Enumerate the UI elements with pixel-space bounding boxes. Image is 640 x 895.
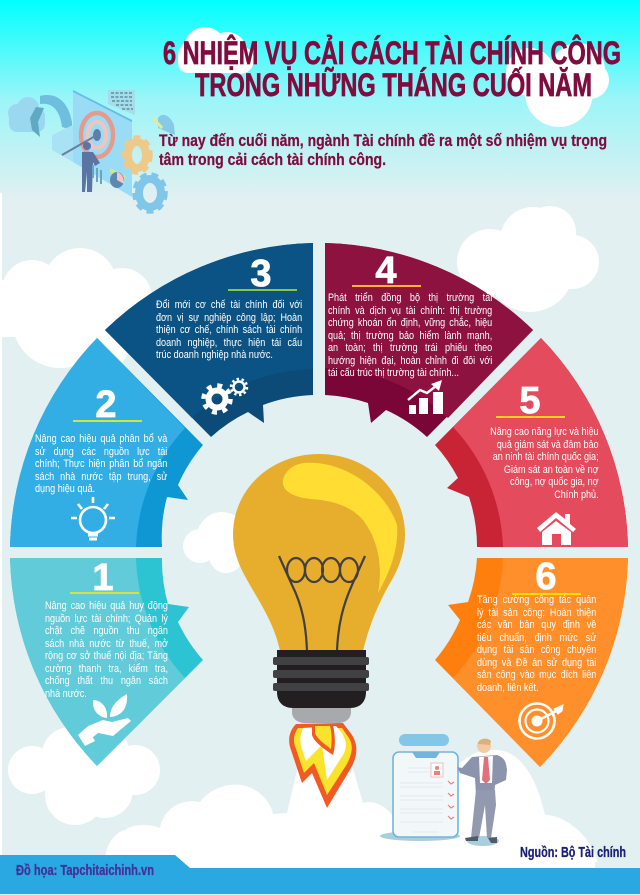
text 4: Phát triển đồng bộ thị trường tài [328, 292, 492, 304]
text 3: thiện cơ chế, chính sách tài chính [156, 324, 302, 336]
icon: man [82, 142, 100, 192]
text 6: Tăng cường công tác quản [477, 594, 596, 606]
text 6: tiêu chuẩn, định mức sử [477, 632, 596, 644]
intro text [159, 132, 607, 169]
text 5: Giám sát an toàn về nợ [504, 464, 599, 476]
text 6: dùng và Đề án sử dụng tài [477, 656, 596, 668]
text 6: các văn bản quy định về [477, 619, 596, 631]
screw base [273, 650, 369, 708]
man in suit [457, 739, 507, 843]
icon: pie chart [93, 165, 125, 188]
cloud: upper left [2, 248, 152, 373]
panel 2 [10, 338, 203, 547]
text 5: công, nợ quốc gia, nợ [510, 476, 599, 488]
text 6: doanh, liên kết. [477, 682, 539, 694]
text 2 [35, 433, 168, 499]
text 2: Nâng cao hiệu quả phân bổ và [35, 433, 167, 445]
number 1: 1 [92, 557, 114, 599]
text 5 [470, 426, 599, 504]
text 6: lý tài sản công; Hoàn thiện [477, 606, 596, 618]
cloud: lower left [8, 725, 160, 825]
icon: gears [204, 379, 247, 412]
highlight [283, 463, 397, 593]
glass [233, 454, 405, 651]
text 4: chính và dịch vụ tài chính: thị trường [328, 304, 492, 316]
text 5: quả giám sát và đảm bảo [497, 438, 599, 450]
text 5: Chính phủ. [555, 488, 599, 500]
intro text: tâm trong cải cách tài chính công. [159, 151, 386, 169]
text 4: tái cấu trúc thị trường tài chính... [328, 367, 459, 379]
text 1: Nâng cao hiệu quả huy động [45, 600, 168, 612]
icon: house [537, 512, 576, 545]
rocket flames [289, 723, 356, 808]
text 1: sách nhà nước từ thuế, mở [45, 638, 168, 650]
text 4: quả; thị trường bảo hiểm lành mạnh, [328, 330, 492, 342]
text 1: cường thanh tra, kiểm tra, [45, 662, 168, 674]
document pill [399, 734, 449, 746]
text 6 [477, 594, 597, 696]
text 1 [45, 600, 169, 702]
icon: screen [73, 90, 132, 197]
icon: cloud and arrow [8, 95, 73, 162]
text 3: doanh nghiệp, thực hiện tái cấu [156, 336, 302, 348]
icon: rising chart [408, 380, 443, 414]
illustration: target board and gears [8, 90, 175, 212]
text 1: nguồn lực tài chính; Quản lý [45, 612, 168, 624]
text 5: an ninh tài chính quốc gia; [493, 451, 599, 463]
text 1: chống thất thu ngân sách [45, 675, 168, 687]
number 4: 4 [375, 250, 397, 292]
panel 5 [435, 338, 628, 547]
text 1: rộng cơ sở thuế nội địa; Tăng [45, 650, 168, 662]
text 2: sử dụng các nguồn lực tài [35, 446, 167, 458]
icon: target and arrow [520, 704, 563, 738]
text 4: chứng khoán ổn định, vững chắc, hiệu [328, 317, 492, 329]
icon: orange gear [123, 137, 151, 173]
text 5: Nâng cao năng lực và hiệu [491, 426, 599, 438]
smoke clouds at bottom [105, 750, 597, 868]
text 3: trúc doanh nghiệp nhà nước. [156, 349, 273, 361]
text 4 [328, 292, 493, 384]
shadow [380, 831, 460, 841]
text 4: an toàn; thị trường trái phiếu theo [328, 342, 492, 354]
icon: target [62, 113, 113, 157]
text 2: dụng hiệu quả. [35, 483, 95, 495]
light bulb [233, 454, 405, 723]
cloud: behind title left [178, 27, 254, 74]
panel 3 [105, 243, 313, 437]
icon: small dark screen [108, 90, 135, 115]
number 3: 3 [250, 253, 272, 295]
icon: small cloud [153, 115, 175, 135]
footer bar [0, 855, 640, 894]
cloud: upper right [457, 206, 599, 312]
icon: blue gear [134, 174, 166, 212]
title [163, 35, 621, 103]
credit: graphics: Đồ họa: Tapchitaichinh.vn [16, 863, 154, 879]
text 2: sách nhà nước tập trung, sử [35, 470, 167, 482]
text 1: chặt chẽ nguồn thu ngân [45, 625, 168, 637]
panel 1 [10, 557, 203, 766]
text 2: chính; Thực hiện phân bổ ngân [35, 458, 167, 470]
number 5: 5 [519, 380, 541, 422]
document [393, 752, 458, 837]
bulb tip [292, 708, 351, 723]
text 3: đơn vị sự nghiệp công lập; Hoàn [156, 312, 302, 324]
number 6: 6 [535, 556, 557, 598]
text 6: dụng tài sản công chuyên [477, 644, 596, 656]
text 1: nhà nước. [45, 688, 87, 700]
panel 6 [435, 556, 628, 767]
cloud: behind bulb [183, 512, 247, 573]
person with document [380, 734, 507, 846]
text 4: hướng hiện đại, hoàn chỉnh đi đôi với [328, 354, 492, 366]
text 3: Đổi mới cơ chế tài chính đối với [156, 299, 302, 311]
filament [279, 556, 365, 651]
icon: light bulb [71, 497, 115, 539]
text 3 [156, 299, 303, 365]
number 2: 2 [95, 384, 117, 426]
panel 4 [325, 243, 533, 437]
cloud: behind title right [506, 43, 609, 127]
text 6: sản công vào mục đích liên [477, 669, 596, 681]
icon: hand and leaves [78, 694, 131, 746]
